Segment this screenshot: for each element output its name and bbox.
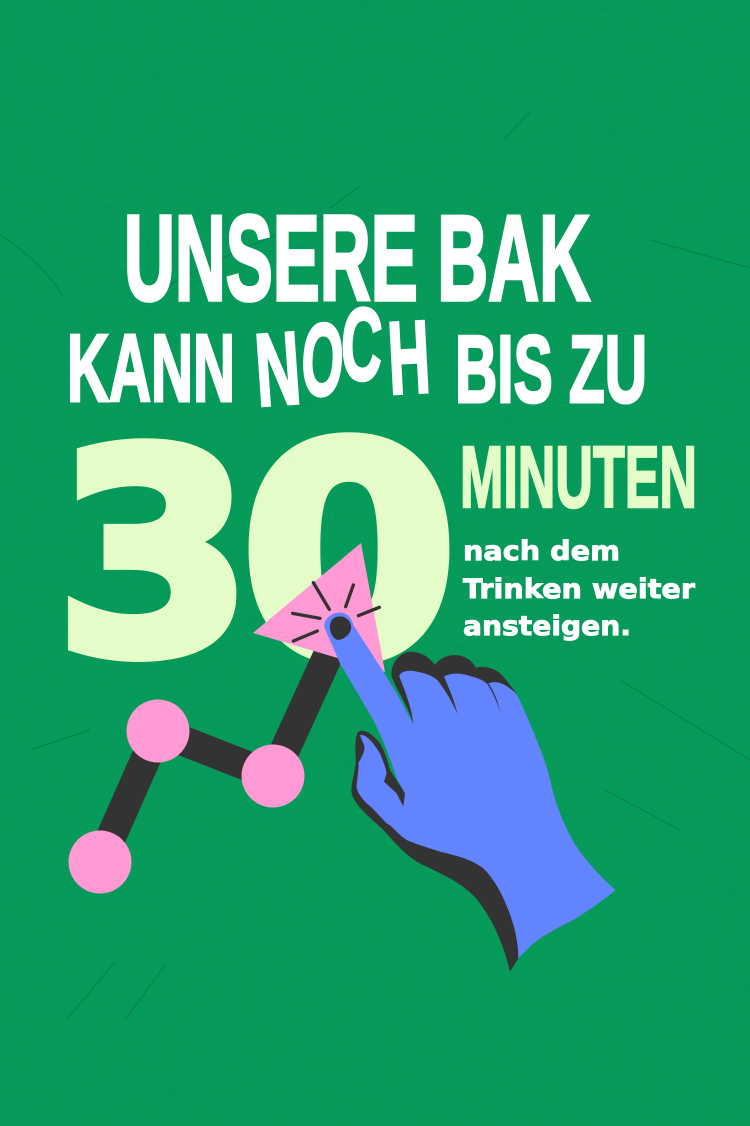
chart line [100,640,335,862]
word: NOCH with tumbling letters: O [299,303,346,419]
big number: 30 [55,384,458,724]
data point 3 [242,744,304,808]
word: NOCH with tumbling letters: N [251,310,304,428]
line chart [68,543,385,894]
heading: KANN NOCH BIS ZU [67,286,647,428]
text block: nach dem Trinken weiter ansteigen. [463,536,696,642]
fingernail [330,616,351,640]
hand shadow [351,652,520,972]
data point 1 [68,830,132,894]
word: KANN: KANN [67,315,235,422]
word: NOCH with tumbling letters [251,286,433,428]
word: NOCH with tumbling letters: H [385,298,433,416]
triangle marker [253,543,385,672]
icon: pointing hand in blue glove [293,583,616,972]
text block: nach dem Trinken weiter ansteigen.: ansteigen. [463,611,631,642]
big number: 30: 3 [55,393,253,719]
tap marks [293,583,379,641]
data point 2 [126,700,190,762]
glove [324,613,616,958]
big number: 30: 0 [240,384,458,724]
text block: nach dem Trinken weiter ansteigen.: nach dem [463,536,620,567]
text block: nach dem Trinken weiter ansteigen.: Trinken weiter [463,574,696,605]
word: NOCH with tumbling letters: C [339,286,384,403]
